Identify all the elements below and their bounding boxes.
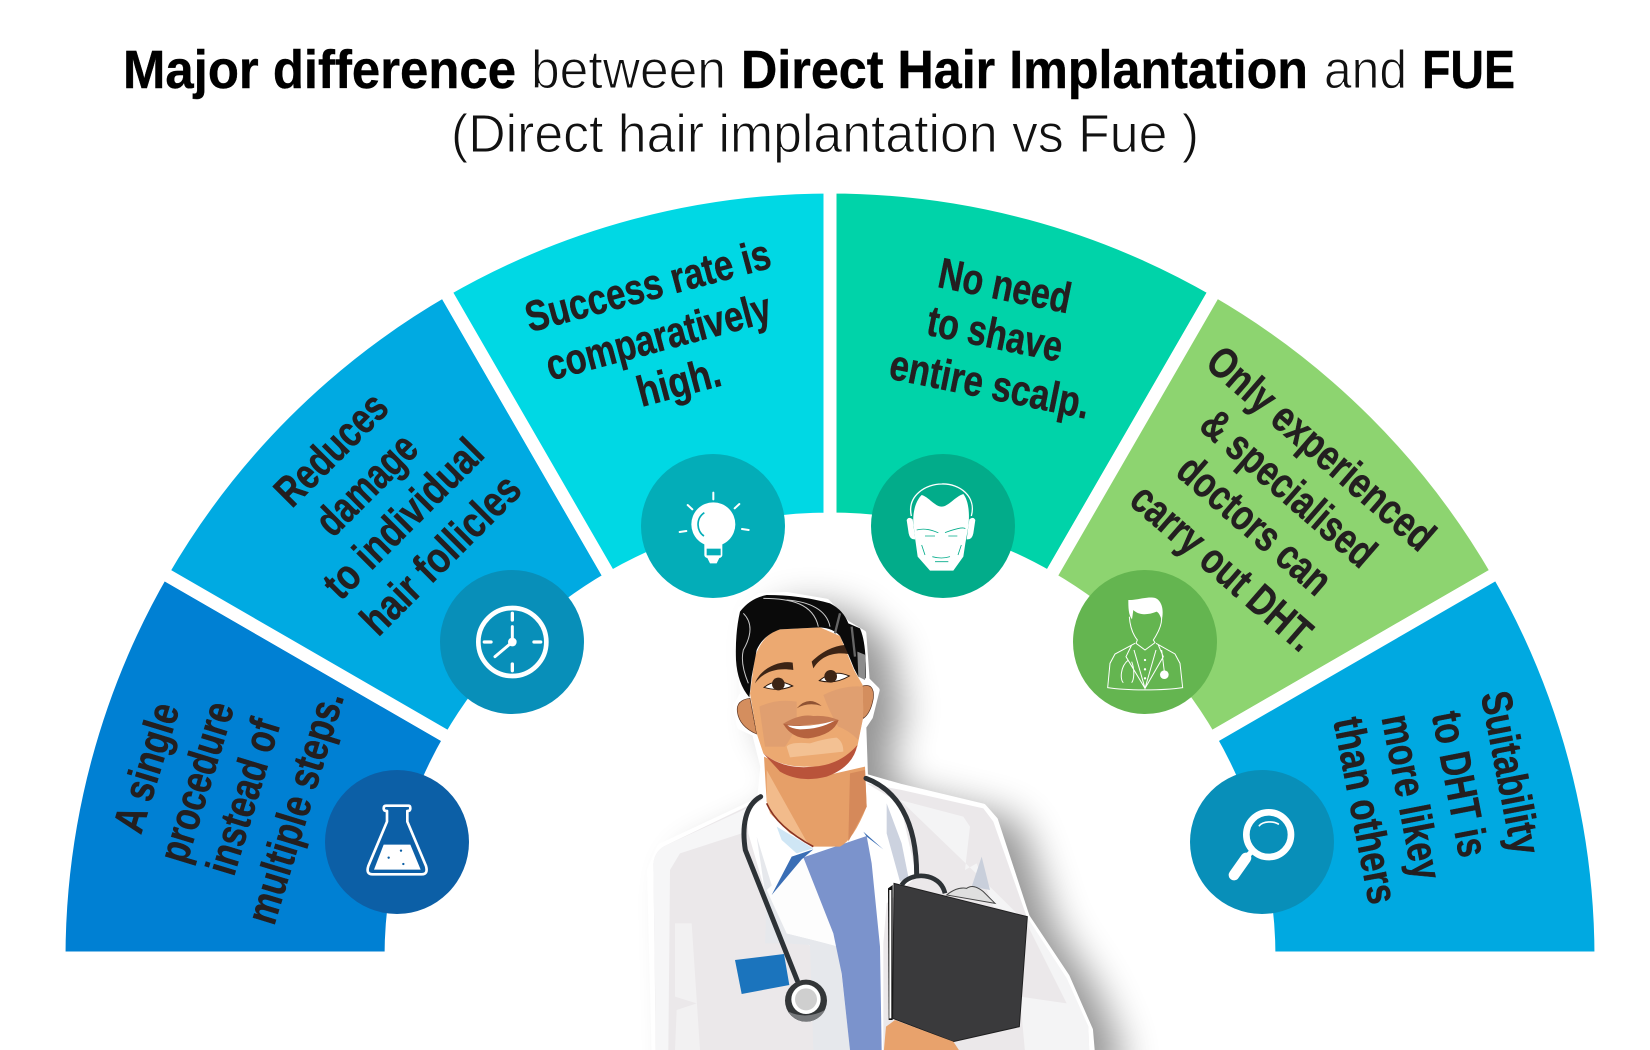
text: no need to shave: No need <box>934 249 1075 323</box>
face <box>750 627 863 779</box>
panel: no need to shave <box>830 187 1216 598</box>
text: single procedure: procedure <box>150 696 244 868</box>
text: experienced doctors: & specialised <box>1191 400 1385 577</box>
text: success rate: comparatively <box>541 284 776 390</box>
text: suitability <box>1311 671 1563 911</box>
text: reduces damage: Reduces <box>265 383 398 516</box>
doctor shadow <box>678 607 1122 1050</box>
title: Direct Hair Implantation <box>741 40 1308 100</box>
text: single procedure <box>90 644 354 932</box>
text: success rate: high. <box>632 348 726 417</box>
panel: suitability <box>1190 572 1601 958</box>
text: reduces damage: damage <box>306 424 428 546</box>
chest piece <box>785 980 827 1022</box>
neck <box>764 757 867 847</box>
icon: head <box>907 484 975 571</box>
title: and <box>1324 40 1407 100</box>
segment: no need to shave <box>830 187 1216 578</box>
text: success rate: Success rate is <box>520 230 776 342</box>
text: experienced doctors: Only experienced <box>1197 337 1444 561</box>
text: reduces damage <box>243 358 531 645</box>
icon: light bulb <box>680 493 749 563</box>
segment: reduces damage <box>162 290 611 738</box>
shirt <box>803 836 882 1050</box>
panel: success rate <box>444 187 830 598</box>
hair <box>736 595 866 697</box>
icon circle: doctor <box>1073 570 1217 714</box>
panel: reduces damage <box>162 290 611 738</box>
text: suitability: Suitability <box>1471 687 1550 858</box>
title: FUE <box>1422 40 1515 100</box>
segment: suitability <box>1210 572 1601 958</box>
segment: success rate <box>444 187 830 578</box>
text: no need to shave <box>883 236 1122 441</box>
text: single procedure: multiple steps. <box>238 686 354 929</box>
hand <box>883 1020 963 1050</box>
doctor white outline <box>650 595 1093 1050</box>
panel: single procedure <box>59 572 469 958</box>
icon circle: head <box>871 454 1015 598</box>
coat <box>653 783 1090 1050</box>
stethoscope <box>744 778 917 981</box>
text: success rate <box>520 230 802 440</box>
text: no need to shave: entire scalp. <box>886 341 1094 429</box>
illustration: doctor <box>650 595 1122 1050</box>
text: no need to shave: to shave <box>923 297 1067 372</box>
text: experienced doctors: doctors can <box>1168 445 1341 605</box>
icon circle: magnifier <box>1190 770 1334 914</box>
text: single procedure: A single <box>105 697 189 838</box>
title: between <box>531 40 726 100</box>
text: suitability: to DHT is <box>1422 707 1497 861</box>
clipboard <box>888 876 1027 1042</box>
icon circle: clock <box>440 570 584 714</box>
icon circle: flask <box>325 770 469 914</box>
icon: magnifier <box>1234 812 1291 875</box>
title: (Direct hair implantation vs Fue ) <box>451 104 1199 164</box>
title: Major difference <box>123 40 516 100</box>
text: suitability: more likey <box>1372 711 1451 884</box>
text: experienced doctors: carry out DHT. <box>1121 474 1325 661</box>
collar <box>772 832 883 895</box>
name badge <box>735 954 789 994</box>
text: experienced doctors <box>1088 323 1447 682</box>
text: suitability: than others <box>1323 713 1407 908</box>
icon circle: light bulb <box>641 454 785 598</box>
text: reduces damage: hair follicles <box>351 465 531 645</box>
text: single procedure: instead of <box>197 713 290 880</box>
ears <box>737 686 874 734</box>
panel: experienced doctors <box>1050 290 1498 738</box>
text: reduces damage: to individual <box>314 429 493 609</box>
icon: doctor <box>1108 597 1183 690</box>
title <box>123 40 1515 164</box>
segment: single procedure <box>59 572 450 958</box>
icon: clock <box>478 608 546 676</box>
segment: experienced doctors <box>1050 290 1498 738</box>
icon: flask <box>368 806 427 874</box>
